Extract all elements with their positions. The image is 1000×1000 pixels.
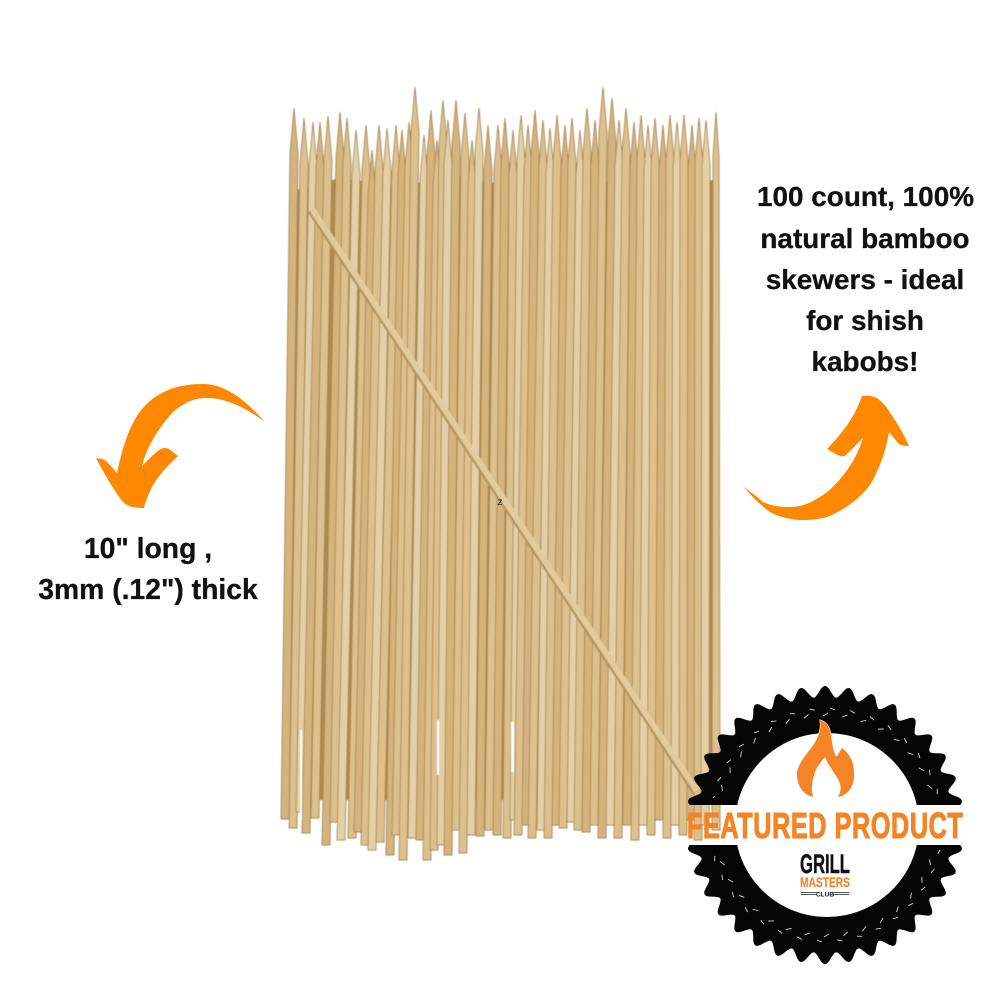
caption: product description (757, 181, 974, 377)
caption: product description: natural bamboo (760, 223, 970, 254)
white stitched line (709, 708, 943, 942)
product photo: bundle of bamboo skewers (281, 87, 720, 860)
scalloped black seal ring (686, 686, 964, 964)
badge: featured product seal (686, 686, 964, 964)
caption: product description: skewers - ideal (766, 264, 964, 295)
caption: product description: 100 count, 100% (757, 181, 974, 212)
icon: orange flame (797, 720, 854, 797)
logo: grill masters club: CLUB (816, 892, 834, 898)
diagonal skewer lying across the bundle (311, 209, 697, 792)
caption: product description: for shish (806, 305, 924, 336)
caption: skewer dimensions: 3mm (.12") thick (38, 573, 258, 605)
logo: grill masters club (800, 849, 850, 898)
small letter z: z (498, 497, 502, 508)
logo: grill masters club: GRILL (800, 849, 850, 879)
caption: skewer dimensions: 10" long , (84, 532, 212, 564)
logo: grill masters club: MASTERS (800, 874, 850, 890)
arrow: left, curving down (96, 384, 265, 508)
heading: featured product: FEATURED PRODUCT (687, 806, 963, 846)
caption: product description: kabobs! (812, 346, 918, 377)
caption: skewer dimensions (38, 532, 258, 605)
arrow: right, curving up (741, 396, 909, 520)
